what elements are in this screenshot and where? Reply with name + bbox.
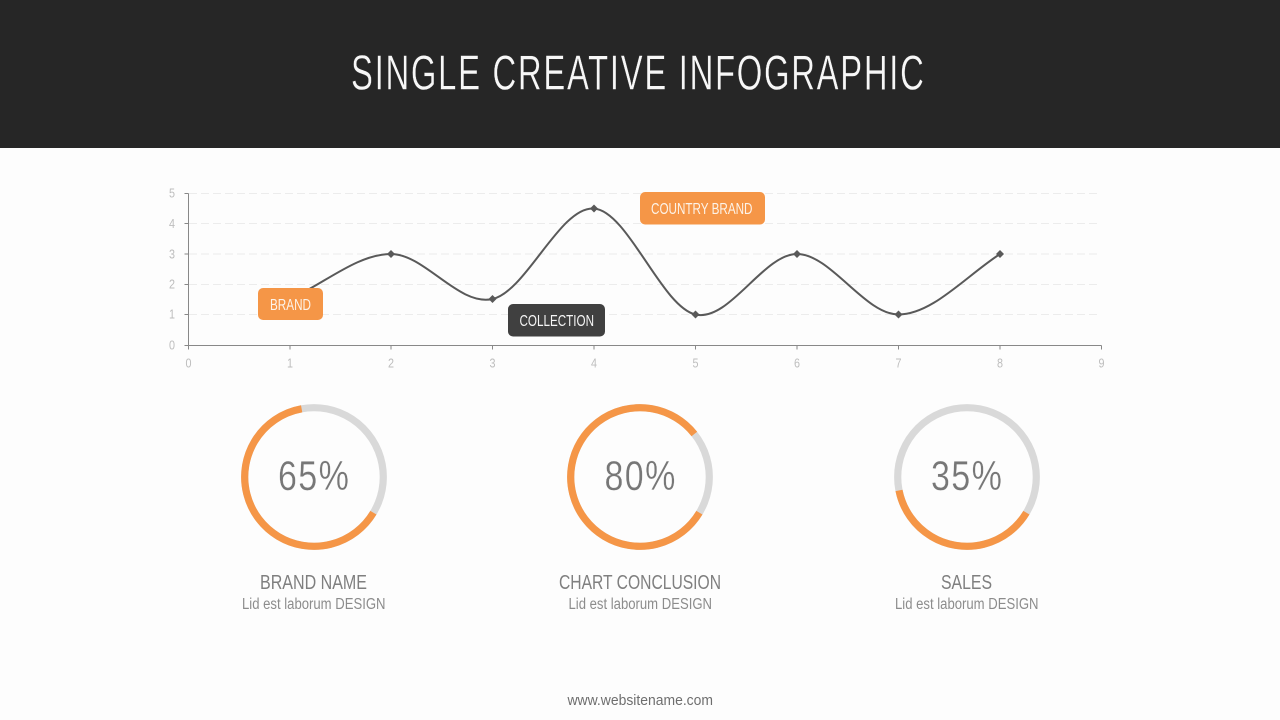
x axis labels: 7 [896, 356, 902, 370]
percentage value: 80% [604, 453, 675, 500]
callout: brand [258, 288, 323, 320]
y axis labels [169, 186, 175, 352]
footer url: www.websitename.com [567, 692, 713, 709]
y axis labels: 5 [169, 186, 175, 200]
callout: collection [508, 304, 605, 336]
x axis labels: 1 [287, 356, 293, 370]
y axis labels: 1 [169, 306, 175, 322]
title: SINGLE CREATIVE INFOGRAPHIC [351, 45, 924, 100]
callout: country brand: COUNTRY BRAND [651, 201, 752, 218]
percentage value: 65% [278, 453, 349, 500]
data line [290, 208, 1000, 315]
callout: country brand [640, 192, 765, 224]
callout: brand: BRAND [270, 297, 311, 314]
x axis labels: 5 [692, 356, 698, 370]
panel heading: SALES [941, 571, 992, 594]
data markers [387, 204, 1004, 318]
y axis labels: 0 [169, 338, 175, 352]
donut: 35% [872, 382, 1062, 572]
x axis labels: 0 [186, 356, 192, 370]
panel heading: CHART CONCLUSION [559, 571, 721, 594]
panel heading: BRAND NAME [260, 571, 367, 594]
panel caption: Lid est laborum DESIGN [242, 596, 386, 613]
x axis labels [186, 356, 1104, 370]
callout: collection: COLLECTION [520, 313, 594, 330]
panel: sales 35% [872, 382, 1062, 613]
x axis labels: 9 [1098, 356, 1104, 370]
x axis labels: 3 [490, 356, 496, 370]
percentage value: 35% [931, 453, 1002, 500]
panel: brand name 65% [219, 382, 409, 613]
panel caption: Lid est laborum DESIGN [895, 596, 1038, 613]
header band with title [0, 0, 1280, 148]
x axis labels: 8 [997, 356, 1003, 370]
x axis labels: 6 [794, 356, 800, 370]
y axis labels: 4 [169, 216, 175, 231]
donut: 80% [545, 382, 735, 572]
y axis labels: 2 [169, 276, 175, 292]
donut: 65% [219, 382, 409, 572]
panel: chart conclusion 80% [545, 382, 735, 613]
x axis labels: 2 [388, 356, 394, 370]
y axis labels: 3 [169, 246, 175, 262]
line chart [169, 186, 1104, 370]
panel caption: Lid est laborum DESIGN [568, 596, 712, 613]
x axis labels: 4 [591, 356, 597, 370]
